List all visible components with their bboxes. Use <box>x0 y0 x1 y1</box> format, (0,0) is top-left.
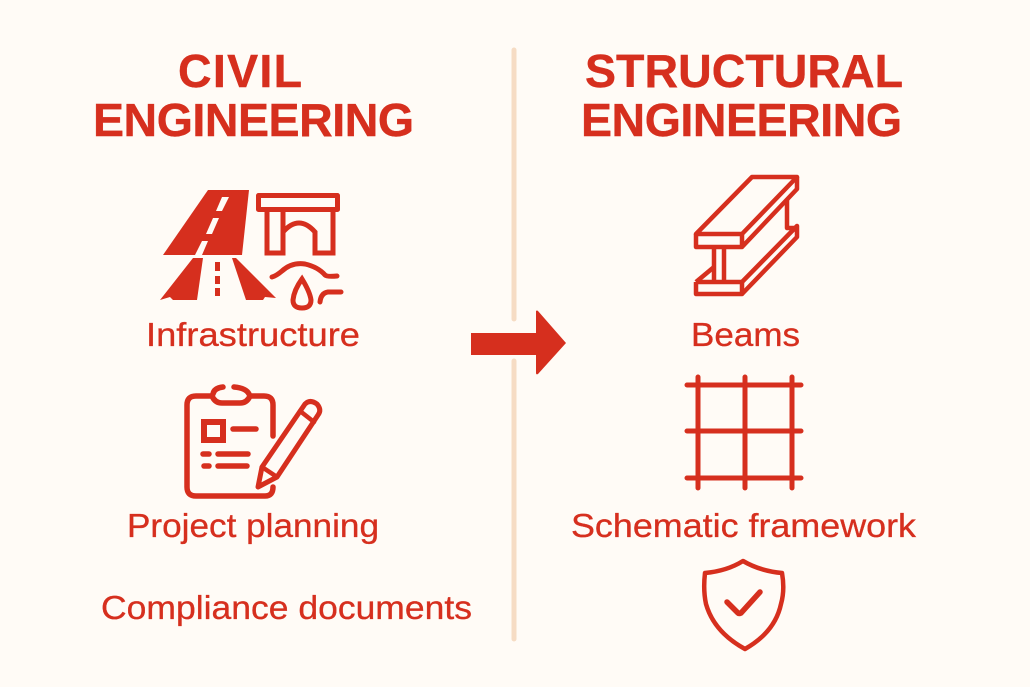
heading: civil engineering: CIVIL <box>178 45 302 97</box>
heading: civil engineering <box>93 45 414 146</box>
icon: steel beam <box>696 177 797 294</box>
road <box>160 190 276 300</box>
heading: structural engineering: STRUCTURAL <box>585 45 903 97</box>
heading: civil engineering: ENGINEERING <box>93 94 414 146</box>
label: infrastructure: Infrastructure <box>146 317 360 354</box>
label: compliance documents: Compliance documents <box>101 590 472 627</box>
icon: infrastructure <box>160 190 341 308</box>
label: beams: Beams <box>691 317 800 354</box>
label: project planning: Project planning <box>127 508 379 545</box>
icon: clipboard and pencil <box>187 387 320 496</box>
icon: schematic grid <box>687 377 801 488</box>
icon: shield with check <box>704 561 783 649</box>
label: schematic framework: Schematic framework <box>571 508 916 545</box>
drop and waves <box>272 264 341 308</box>
arrow <box>471 310 566 374</box>
bridge <box>258 196 338 253</box>
center divider <box>512 50 516 639</box>
heading: structural engineering <box>581 45 903 146</box>
heading: structural engineering: ENGINEERING <box>581 94 902 146</box>
